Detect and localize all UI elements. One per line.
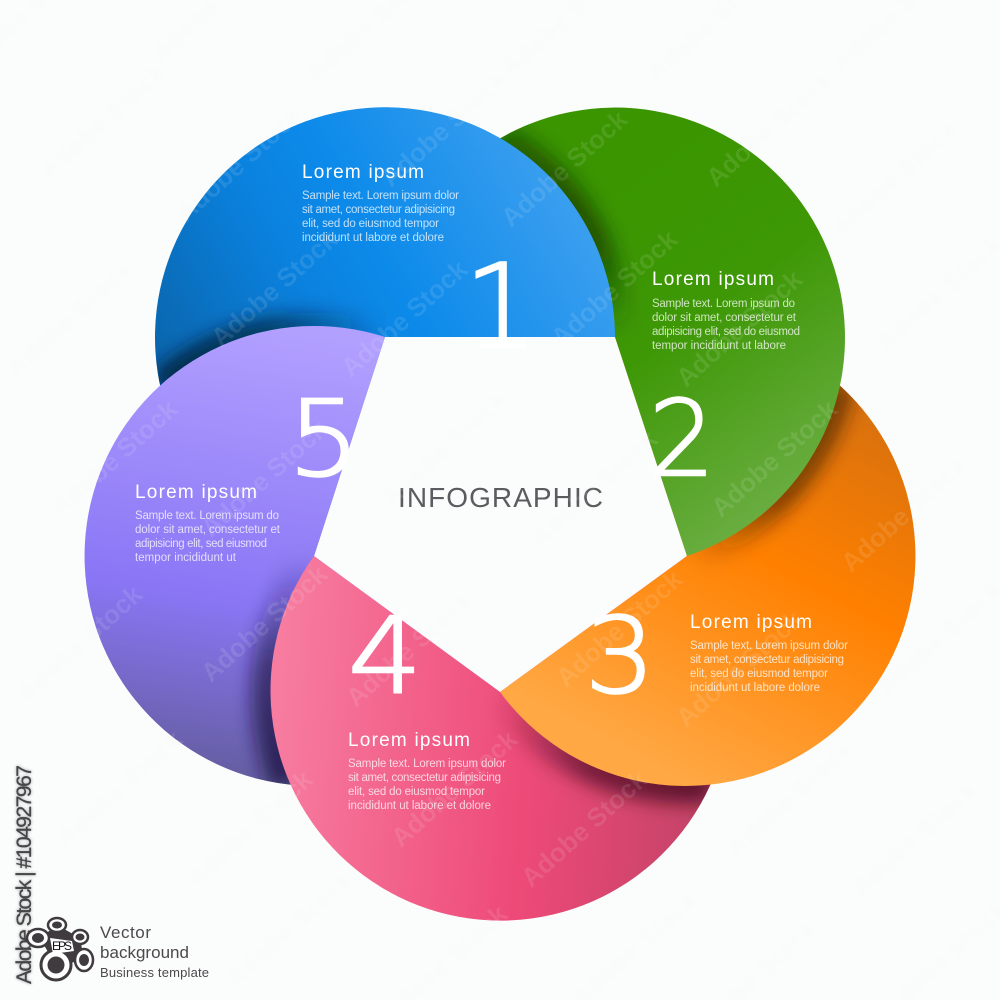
panel 4 text: Lorem ipsum	[348, 730, 470, 751]
watermark pattern: Adobe Stock	[670, 604, 808, 733]
shadow of green on orange	[687, 384, 840, 556]
watermark pattern: Adobe Stock	[720, 734, 858, 863]
panel 3 text: incididunt ut labore dolore	[690, 682, 820, 694]
panel 5 text	[135, 482, 281, 564]
panel 3: orange sector	[500, 326, 915, 786]
watermark pattern: Adobe Stock	[545, 224, 683, 353]
watermark pattern: Adobe Stock	[205, 224, 343, 353]
shadow of purple on blue	[160, 326, 385, 385]
panel 1 text: Sample text. Lorem ipsum dolor	[302, 190, 459, 202]
watermark pattern: Adobe Stock	[525, 424, 663, 553]
watermark pattern: Adobe Stock	[180, 764, 318, 893]
watermark pattern: Adobe Stock	[825, 114, 963, 243]
vector background caption: Vector	[100, 923, 151, 942]
panel 5 text: dolor sit amet, consectetur et	[135, 524, 281, 536]
shadow of blue on green	[500, 138, 615, 337]
panel 3 text: elit, sed do eiusmod tempor	[690, 668, 828, 680]
watermark pattern: Adobe Stock	[550, 564, 688, 693]
panel 2 text: adipisicing elit, sed do eiusmod	[652, 326, 800, 338]
watermark pattern: Adobe Stock	[170, 99, 308, 228]
panel 1 text	[302, 162, 459, 244]
panel 1 text: Lorem ipsum	[302, 162, 424, 183]
watermark pattern: Adobe Stock	[375, 64, 513, 193]
watermark pattern: Adobe Stock	[340, 584, 478, 713]
watermark pattern: Adobe Stock	[385, 724, 523, 853]
shadow of pink on purple	[269, 556, 314, 785]
watermark pattern: Adobe Stock	[50, 724, 188, 853]
panel 1: blue sector overlap above green	[385, 138, 615, 337]
stock id vertical label: Adobe Stock | #104927967	[13, 765, 36, 984]
number 4: 4	[348, 595, 422, 717]
watermark pattern: Adobe Stock	[0, 254, 138, 383]
watermark pattern: Adobe Stock	[45, 394, 183, 523]
number 1: 1	[464, 240, 538, 375]
watermark pattern: Adobe Stock	[335, 254, 473, 383]
number 5: 5	[288, 378, 360, 500]
watermark pattern: Adobe Stock	[195, 414, 333, 543]
watermark pattern: Adobe Stock	[705, 394, 843, 523]
panel 2: green sector	[385, 108, 845, 556]
panel 5: purple sector	[85, 326, 500, 786]
panel 5 text: Sample text. Lorem ipsum do	[135, 510, 279, 522]
panel 2 text: Lorem ipsum	[652, 269, 774, 290]
panel 3 text: Sample text. Lorem ipsum dolor	[690, 640, 848, 652]
watermark pattern: Adobe Stock	[10, 579, 148, 708]
center title: INFOGRAPHIC	[398, 482, 603, 513]
panel 2 text: tempor incididunt ut labore	[652, 340, 786, 352]
number 2: 2	[649, 378, 715, 500]
panel 4 text	[348, 730, 506, 812]
watermark pattern: Adobe Stock	[845, 774, 983, 903]
panel 3 text: sit amet, consectetur adipisicing	[690, 654, 844, 666]
watermark pattern: Adobe Stock	[700, 64, 838, 193]
icon: EPS badge	[27, 918, 93, 980]
panel 5 text: tempor incididunt ut	[135, 552, 237, 564]
panel 5 text: Lorem ipsum	[135, 482, 257, 503]
watermark pattern: Adobe Stock	[33, 57, 171, 186]
watermark pattern: Adobe Stock	[220, 864, 358, 993]
panel 1 text: elit, sed do eiusmod tempor	[302, 218, 439, 230]
panel 2 text: Sample text. Lorem ipsum do	[652, 298, 795, 310]
panel 4 text: elit, sed do eiusmod tempor	[348, 786, 485, 798]
watermark pattern: Adobe Stock	[195, 559, 333, 688]
panel 2 text	[652, 269, 800, 352]
panel 3 text	[690, 612, 848, 694]
panel 4: pink sector	[270, 556, 730, 921]
vector background caption: Business template	[100, 965, 209, 980]
panel 4 text: Sample text. Lorem ipsum dolor	[348, 758, 506, 770]
panel 3 text: Lorem ipsum	[690, 612, 812, 633]
panel 1 text: sit amet, consectetur adipisicing	[302, 204, 455, 216]
panel 2 text: dolor sit amet, consectetur et	[652, 312, 797, 324]
number 3: 3	[585, 595, 655, 717]
icon: EPS badge: EPS	[52, 939, 72, 953]
panel 5 text: adipisicing elit, sed eiusmod	[135, 538, 267, 550]
panel 1: blue sector	[155, 107, 615, 556]
panel 4 text: sit amet, consectetur adipisicing	[348, 772, 501, 784]
watermark pattern: Adobe Stock	[670, 264, 808, 393]
watermark pattern: Adobe Stock	[515, 764, 653, 893]
watermark pattern: Adobe Stock	[495, 104, 633, 233]
panel 1 text: incididunt ut labore et dolore	[302, 232, 444, 244]
watermark pattern: Adobe Stock	[835, 449, 973, 578]
panel 4 text: incididunt ut labore et dolore	[348, 800, 491, 812]
vector background caption	[100, 923, 209, 980]
shadow of orange on pink	[500, 692, 711, 786]
watermark pattern: Adobe Stock	[375, 384, 513, 513]
vector background caption: background	[100, 943, 189, 962]
